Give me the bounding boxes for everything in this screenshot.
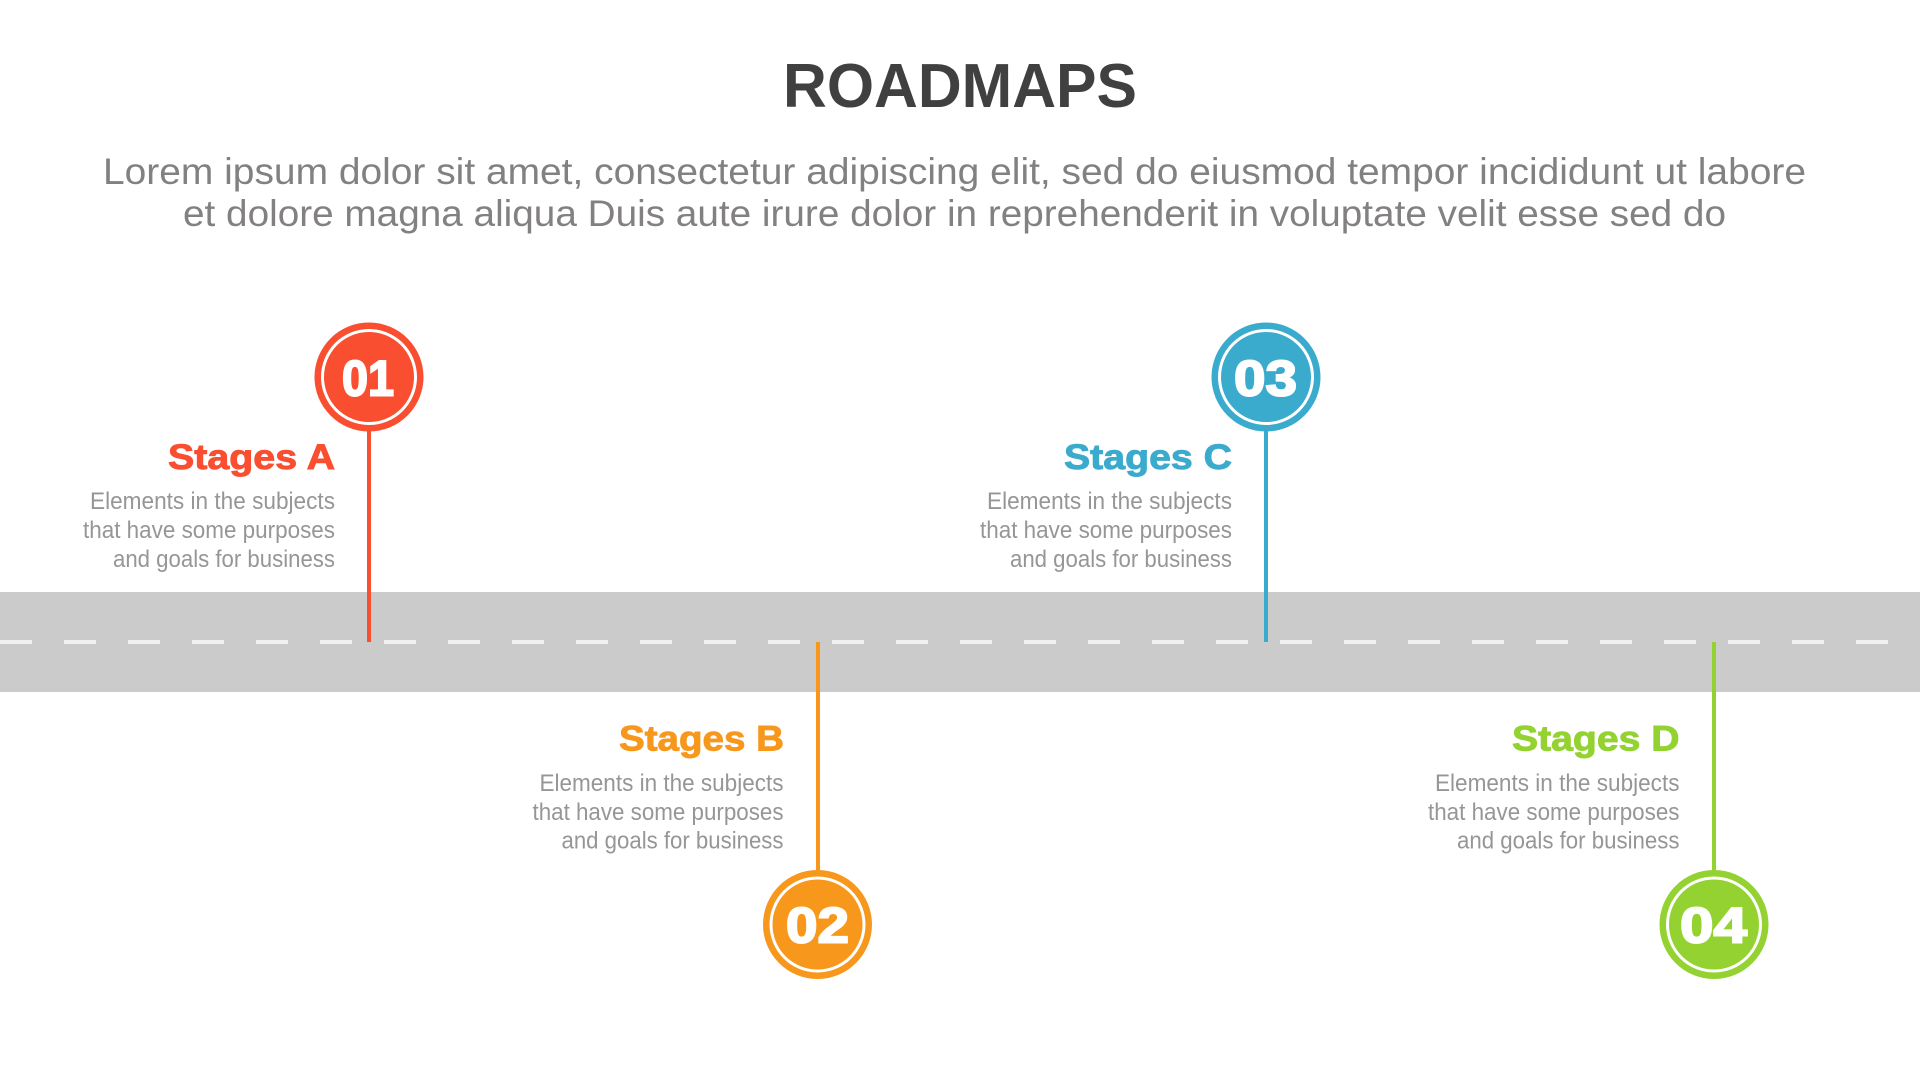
stage D text: that have some purposes xyxy=(1428,799,1680,826)
stage C text: Stages C xyxy=(1064,438,1232,477)
stage A marker xyxy=(314,322,424,642)
stage B text xyxy=(532,720,784,854)
title: ROADMAPS xyxy=(783,52,1137,121)
stage B marker xyxy=(763,642,872,979)
stage C text: Elements in the subjects xyxy=(987,488,1232,515)
stage D text xyxy=(1428,720,1680,854)
stage C marker xyxy=(1212,322,1320,642)
stage A marker: 01 xyxy=(342,350,394,406)
subtitle text xyxy=(103,151,1806,234)
stage C text: that have some purposes xyxy=(980,517,1232,544)
stage A text: Stages A xyxy=(168,438,335,477)
stage A text: Elements in the subjects xyxy=(90,488,335,515)
stage D text: Elements in the subjects xyxy=(1435,770,1680,797)
stage A text: that have some purposes xyxy=(83,517,335,544)
subtitle text: et dolore magna aliqua Duis aute irure dolor in reprehenderit in voluptate velit esse sed do xyxy=(183,193,1726,234)
stage A text xyxy=(83,438,335,573)
stage C marker: 03 xyxy=(1234,350,1297,406)
stage B marker: 02 xyxy=(786,898,849,954)
road xyxy=(0,592,1920,692)
subtitle text: Lorem ipsum dolor sit amet, consectetur adipiscing elit, sed do eiusmod tempor incididunt ut labore xyxy=(103,151,1806,192)
stage C text: and goals for business xyxy=(1010,546,1232,573)
stage B text: Stages B xyxy=(619,720,784,758)
stage D marker: 04 xyxy=(1680,898,1747,954)
stage D text: and goals for business xyxy=(1457,828,1680,854)
stage B text: and goals for business xyxy=(562,828,784,854)
stage D text: Stages D xyxy=(1512,720,1680,758)
stage C text xyxy=(980,438,1232,573)
stage B text: that have some purposes xyxy=(532,799,784,826)
stage D marker xyxy=(1660,642,1768,979)
stage A text: and goals for business xyxy=(113,546,335,573)
stage B text: Elements in the subjects xyxy=(540,770,784,797)
